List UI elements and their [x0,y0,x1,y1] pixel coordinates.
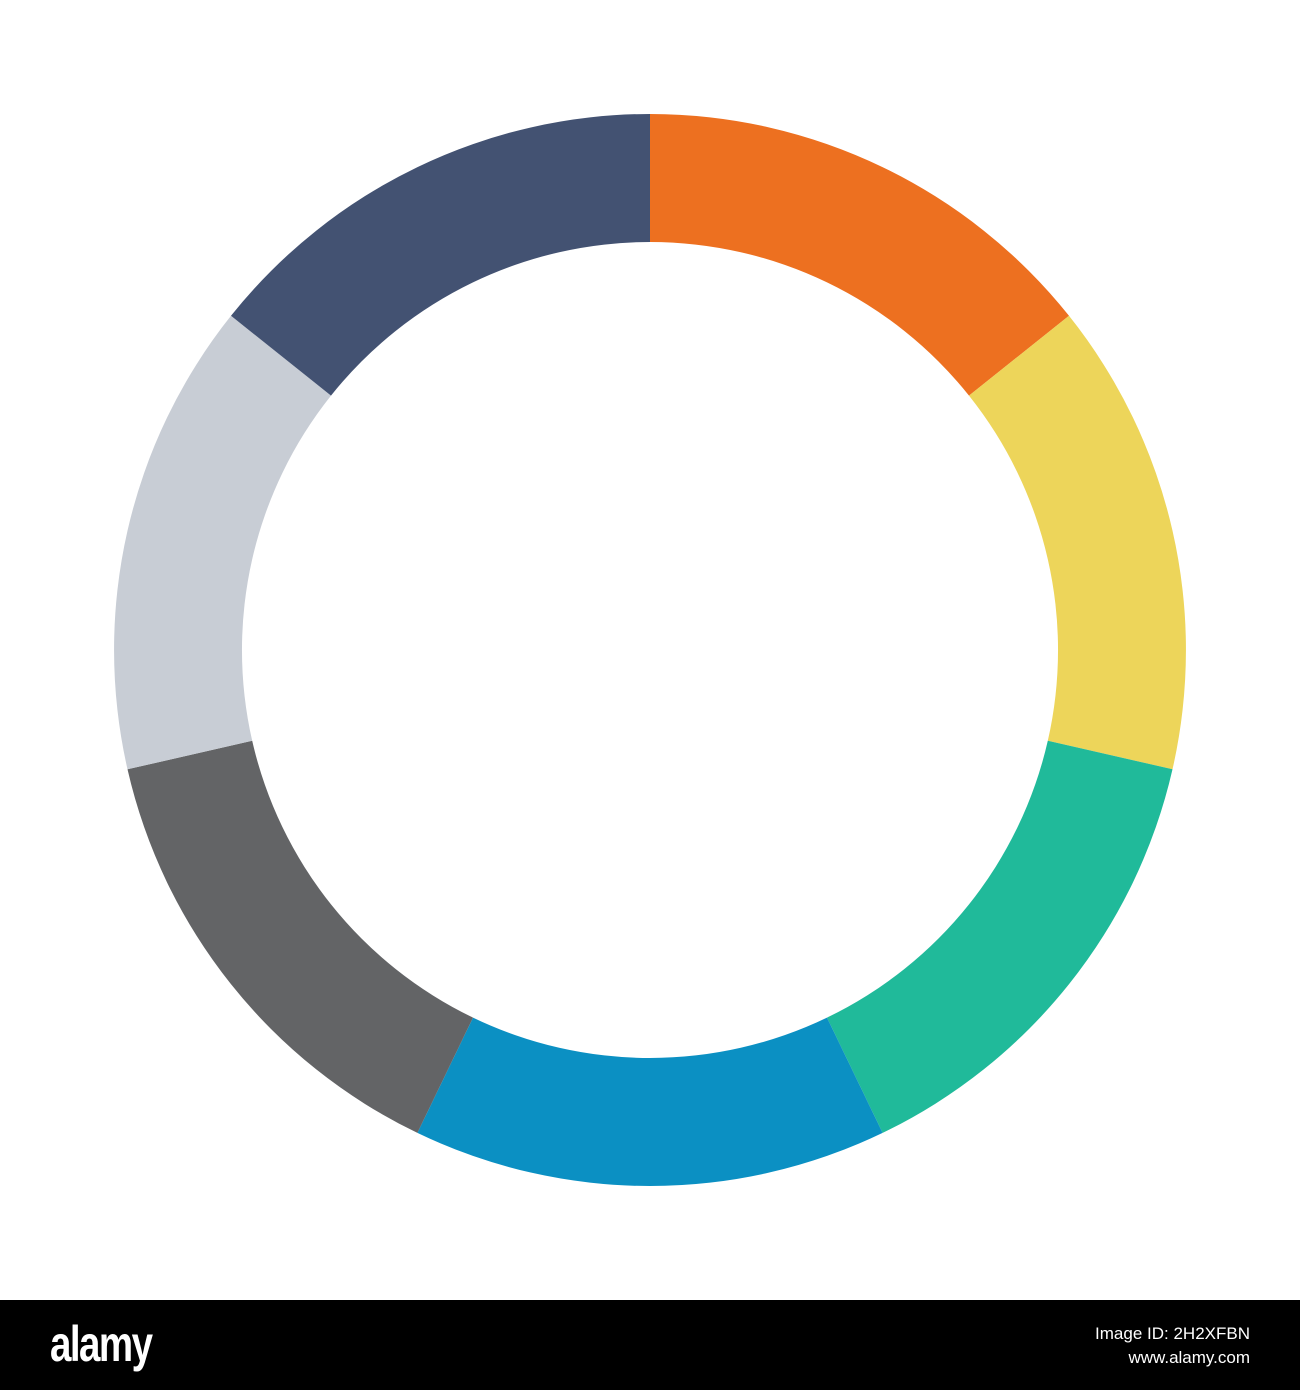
segment: orange [650,114,1069,396]
image id text: Image ID: 2H2XFBN [1095,1324,1250,1343]
image id text: www.alamy.com [1128,1348,1250,1367]
segment: green [827,741,1172,1133]
image id text [1095,1324,1250,1367]
footer bar [0,1300,1300,1390]
segment: navy [231,114,650,396]
segment: light gray [114,316,331,769]
segment: dark gray [128,741,473,1133]
segment: yellow [969,316,1186,769]
segment: blue [417,1018,883,1186]
logo text: alamy [50,1316,151,1372]
